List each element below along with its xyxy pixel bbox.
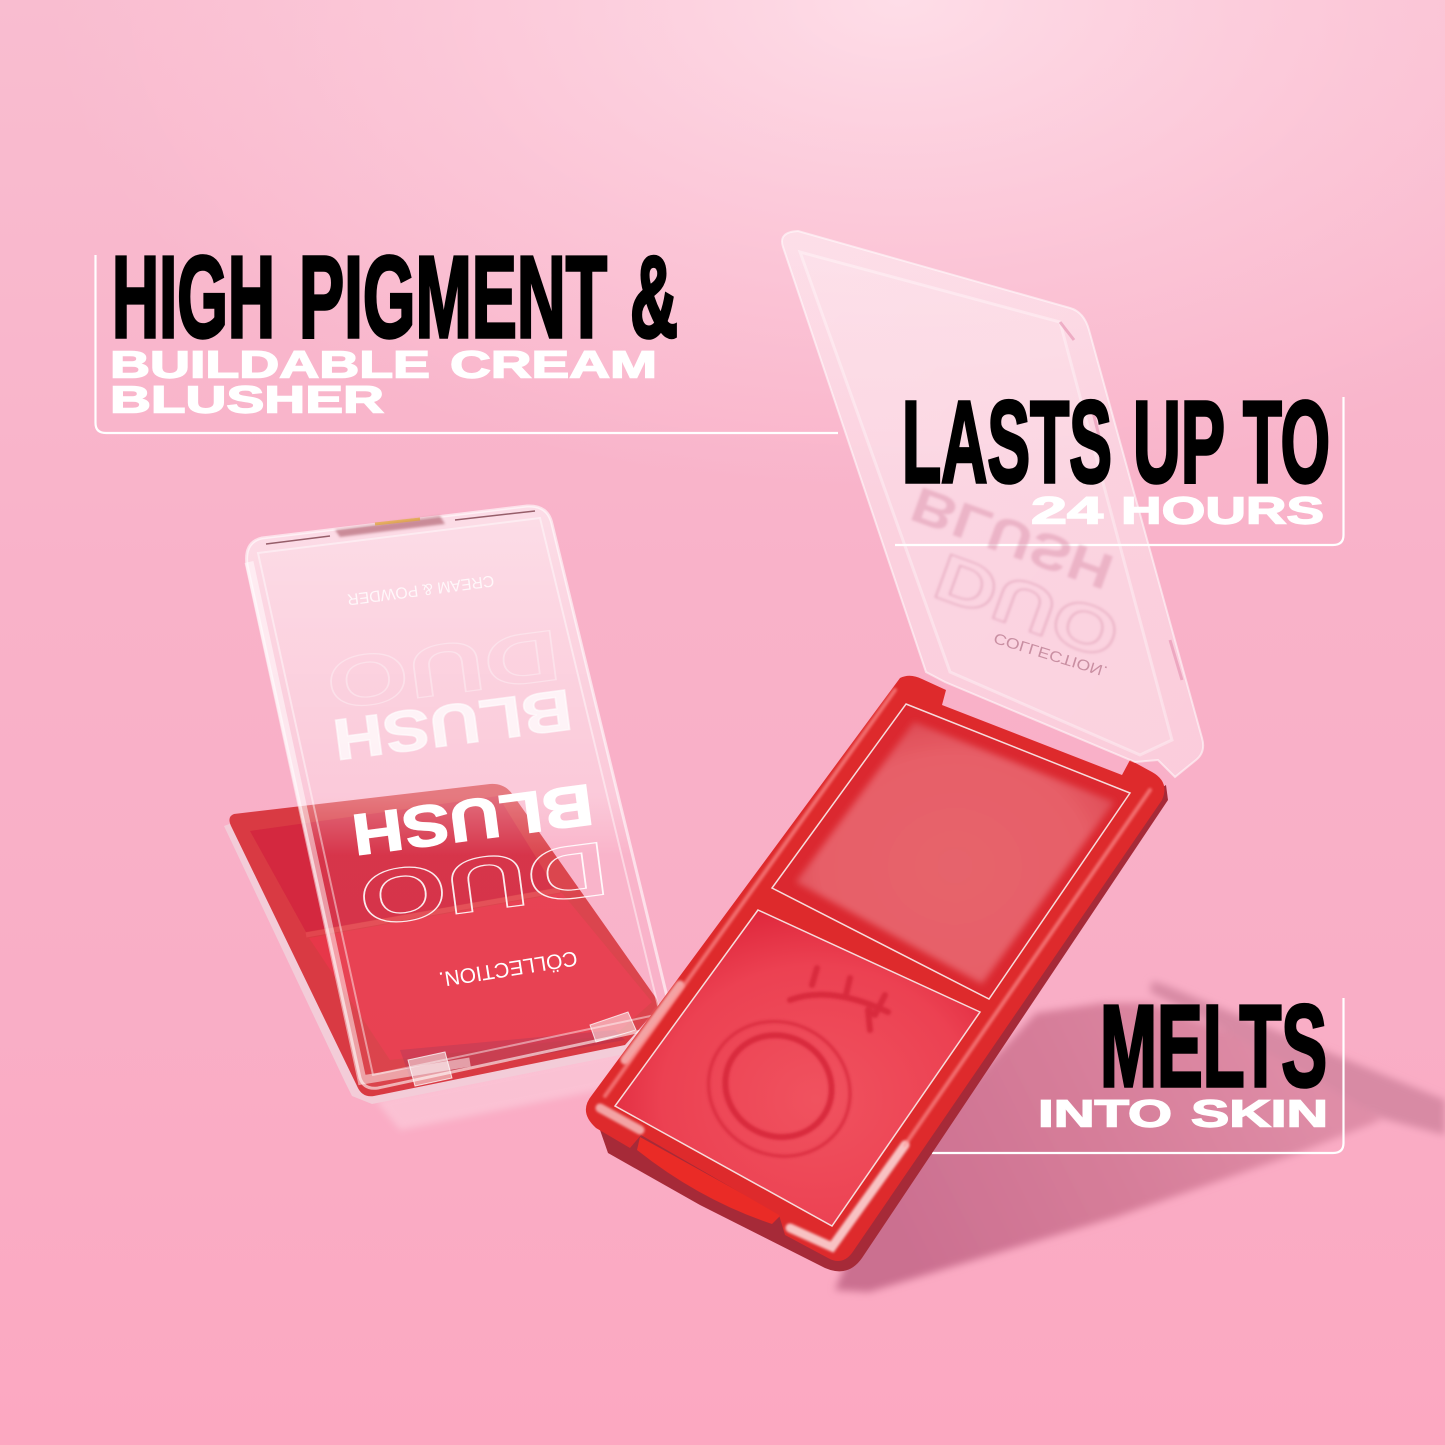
subheading: 24 hours — [1031, 490, 1324, 532]
subheading: 24 hours: HOURS — [1121, 490, 1324, 532]
right compact side wall — [600, 785, 1168, 1271]
powder pan — [615, 910, 980, 1226]
embossed crown logo — [685, 968, 888, 1181]
lid text: duo outline faint: DUO — [321, 614, 565, 724]
left compact lid reflection on surface — [375, 1045, 640, 1130]
subheading: into skin: SKIN — [1191, 1094, 1328, 1136]
right compact base — [586, 676, 1164, 1261]
reflected duo wording: DUO — [925, 539, 1129, 674]
heading: lasts up to: UP — [1133, 377, 1225, 507]
shadow of right compact — [835, 981, 1445, 1292]
subheading: buildable cream: CREAM — [450, 344, 657, 386]
heading: high pigment — [112, 232, 678, 362]
callout frame: buildable cream blusher — [96, 255, 838, 433]
left compact base — [229, 784, 658, 1096]
callout frame: lasts up to 24 hours — [895, 397, 1344, 545]
right compact transparent lid — [782, 231, 1203, 777]
heading: high pigment: HIGH — [112, 232, 275, 362]
left compact transparent lid — [247, 506, 671, 1088]
right compact — [586, 676, 1168, 1271]
heading: high pigment: & — [630, 232, 678, 362]
heading: lasts up to: TO — [1243, 377, 1330, 507]
reflected blush wording: BLUSH — [904, 476, 1120, 600]
heading: high pigment: PIGMENT — [299, 232, 607, 362]
lid hinges — [408, 1012, 636, 1086]
subheading: buildable cream — [110, 344, 657, 386]
reflected collection wording: COLLECTION. — [992, 629, 1110, 680]
lid text: blush white: BLUSH — [348, 771, 597, 867]
lid text: duo outline: DUO — [354, 825, 613, 942]
lid text: collection: CÖLLECTION. — [437, 946, 579, 991]
embossed ring — [685, 997, 874, 1181]
subheading: blusher: BLUSHER — [110, 380, 384, 422]
heading: lasts up to: LASTS — [902, 377, 1112, 507]
subheading: buildable cream: BUILDABLE — [110, 344, 430, 386]
right compact bottom clasp — [637, 1137, 781, 1224]
right compact highlights — [600, 690, 1150, 1247]
callout frame: melts into skin — [932, 998, 1344, 1153]
embossed crown — [790, 968, 888, 1030]
subheading: into skin — [1038, 1094, 1328, 1136]
left compact silver side — [224, 820, 645, 1104]
lid text: blush faint: BLUSH — [329, 676, 576, 772]
lid text: cream and powder: CREAM & POWDER — [346, 571, 495, 608]
left compact — [224, 506, 671, 1130]
cream pan — [772, 704, 1130, 999]
subheading: into skin: INTO — [1038, 1094, 1172, 1136]
subheading: 24 hours: 24 — [1031, 490, 1103, 532]
